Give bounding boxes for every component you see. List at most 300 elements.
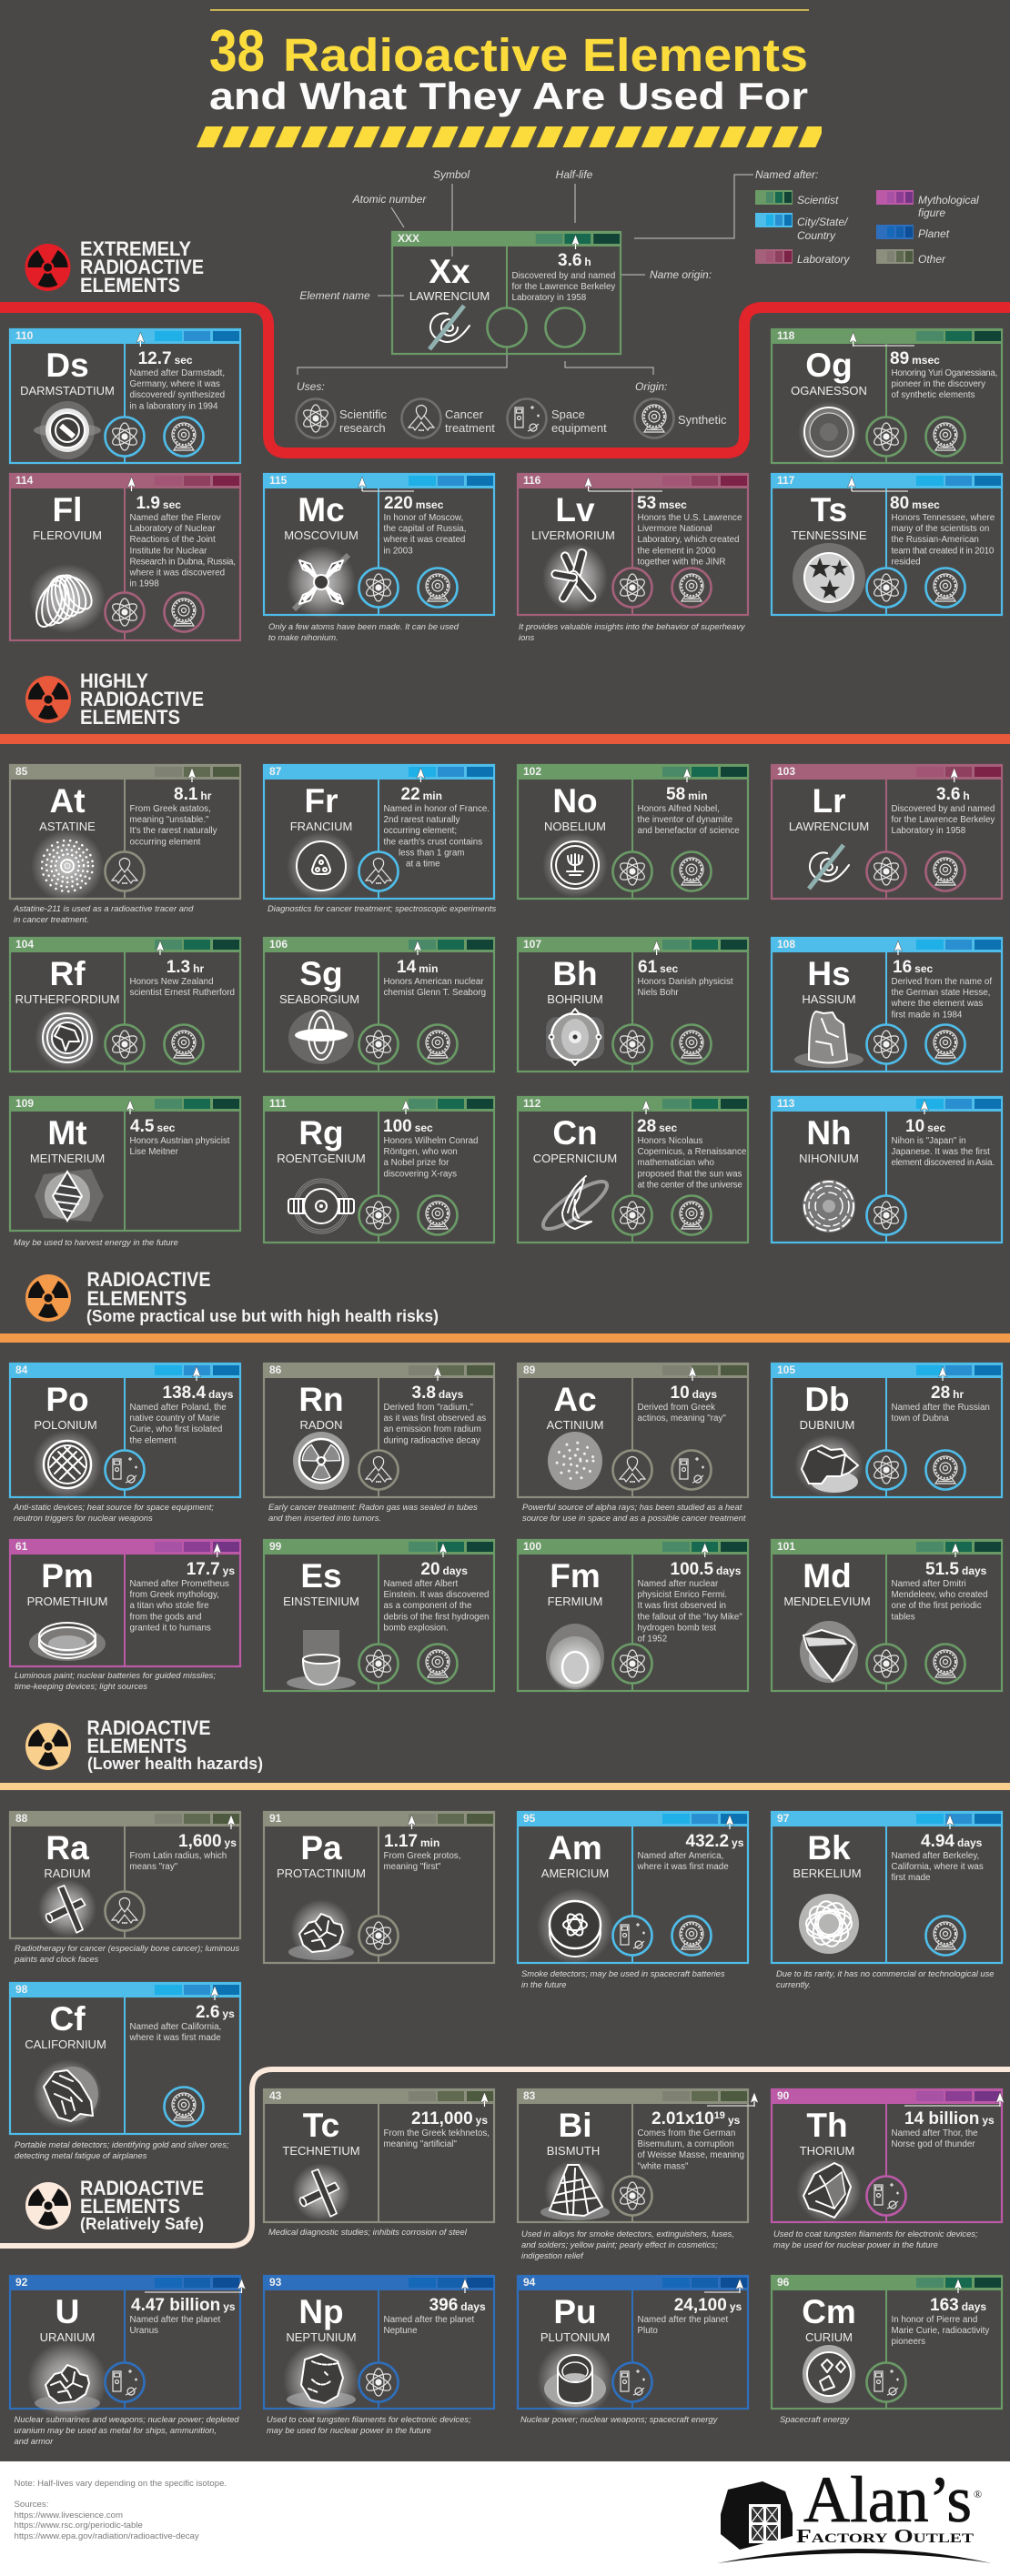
name origin: granted it to humans <box>129 1623 211 1633</box>
use: cancer <box>106 1892 144 1930</box>
name origin: Curie, who first isolated <box>129 1424 222 1434</box>
panel: Ds darmstadtium <box>9 328 241 464</box>
section heading: some practical use: ELEMENTS <box>87 1287 187 1310</box>
name origin: Copernicus, a Renaissance <box>637 1147 747 1157</box>
caption: Bi: Used in alloys for smoke detectors, extinguishers, fuses, <box>521 2229 734 2239</box>
use: research <box>613 1024 651 1064</box>
icon: Pa <box>288 1899 354 1961</box>
element name: BOHRIUM <box>547 992 603 1006</box>
half-life: 80msec <box>890 494 940 513</box>
legend: callout labels: Named after: <box>755 168 818 181</box>
atomic number: 86 <box>269 1363 282 1376</box>
name origin: Named after the Russian <box>892 1403 990 1413</box>
arrow <box>894 941 903 955</box>
symbol: Fm <box>550 1557 601 1595</box>
icon: Pm <box>29 1623 106 1661</box>
use: cancer <box>613 1450 651 1490</box>
panel: Am americium <box>517 1811 749 1965</box>
name origin: From Latin radius, which <box>129 1851 227 1861</box>
name origin: native country of Marie <box>129 1414 220 1424</box>
use: cancer <box>359 1450 399 1490</box>
caption: Cf: Portable metal detectors; identifying gold and silver ores; <box>15 2139 229 2149</box>
arrow <box>921 1100 928 1114</box>
atomic number: 110 <box>15 329 34 342</box>
name origin: of synthetic elements <box>892 390 975 400</box>
element name: BERKELIUM <box>793 1867 862 1880</box>
caption: Th: may be used for nuclear power in the future <box>773 2239 938 2249</box>
name origin: discovered/ synthesized <box>129 390 225 400</box>
element name: MEITNERIUM <box>30 1152 105 1165</box>
legend: uses and origin key: treatment <box>445 421 495 435</box>
caption: Np: Used to coat tungsten filaments for electronic devices; <box>267 2414 471 2424</box>
legend: named-after colour key: City/State/ <box>797 216 849 228</box>
use: cancer <box>106 851 144 891</box>
element name: BISMUTH <box>547 2144 600 2158</box>
name origin: proposed that the sun was <box>637 1169 742 1179</box>
symbol: Po <box>45 1381 89 1418</box>
symbol: Tc <box>303 2107 339 2144</box>
legend: uses and origin key: Uses: <box>297 380 325 393</box>
caption: Rn: and then inserted into tumors. <box>268 1513 381 1523</box>
element name: POLONIUM <box>34 1418 97 1432</box>
symbol: Am <box>548 1829 602 1867</box>
use: synthetic <box>926 1916 965 1956</box>
name origin: Norse god of thunder <box>892 2139 975 2149</box>
name origin: Honors American nuclear <box>384 977 484 987</box>
atomic number: 95 <box>523 1812 536 1825</box>
arrow <box>480 2092 489 2107</box>
legend: uses and origin key: research <box>339 421 386 435</box>
atomic number: 61 <box>15 1540 28 1553</box>
name origin: Research in Dubna, Russia, <box>129 557 236 567</box>
arrow <box>408 1815 416 1829</box>
name origin: together with the JINR <box>637 557 725 567</box>
caption: Bi: indigestion relief <box>521 2250 584 2260</box>
section heading: relatively safe: ELEMENTS <box>80 2195 180 2218</box>
atomic number: 105 <box>777 1363 795 1376</box>
element name: RADON <box>300 1418 342 1432</box>
arrow <box>402 1100 409 1114</box>
name origin: Named after the Flerov <box>129 513 221 523</box>
atomic number: 107 <box>523 938 541 951</box>
section heading: relatively safe <box>25 2177 204 2233</box>
name origin: Honoring Yuri Oganessiana, <box>892 368 997 378</box>
name origin: where it was discovered <box>129 568 225 579</box>
name origin: for the Lawrence Berkeley <box>892 815 995 825</box>
name origin: one of the first periodic <box>892 1601 982 1611</box>
icon: Db <box>794 1434 864 1496</box>
half-life: 2.01x10 <box>651 2109 714 2128</box>
half-life: 100.5days <box>670 1560 742 1579</box>
arrow <box>946 1815 954 1829</box>
caption: Am: Smoke detectors; may be used in spacecraft batteries <box>521 1968 725 1978</box>
arrow <box>849 332 857 347</box>
caption: Pm: time-keeping devices; light sources <box>15 1681 147 1691</box>
name origin: and benefactor of science <box>637 826 740 836</box>
arrow <box>417 768 425 782</box>
element name: COPERNICIUM <box>533 1152 617 1165</box>
element name: MENDELEVIUM <box>783 1595 871 1608</box>
caption: Bk: Due to its rarity, it has no commercial or technological use <box>776 1968 995 1978</box>
element name: RUTHERFORDIUM <box>15 992 119 1006</box>
section heading: extremely radioactive: EXTREMELY <box>80 237 191 260</box>
half-life: 28sec <box>637 1117 677 1136</box>
atomic number: 113 <box>777 1097 795 1110</box>
panel: legend element card <box>391 231 621 355</box>
half-life: 211,000ys <box>411 2109 488 2128</box>
arrow <box>213 1543 221 1557</box>
title block: Radioactive Elements <box>283 29 808 81</box>
cream section border <box>0 2069 1010 2246</box>
half-life: 1.9sec <box>136 494 181 513</box>
name origin: Named after Poland, the <box>129 1403 227 1413</box>
use: synthetic <box>164 1024 204 1064</box>
arrow <box>584 477 592 491</box>
panel: Ac actinium <box>517 1363 749 1498</box>
name origin: first made <box>892 1873 931 1883</box>
section heading: some practical use: RADIOACTIVE <box>87 1268 211 1291</box>
atomic number: 83 <box>523 2089 536 2102</box>
caption: U: uranium may be used as metal for ships, ammunition, <box>15 2425 217 2435</box>
name origin: the earth's crust contains <box>384 837 482 847</box>
name origin: an emission from radium <box>384 1424 481 1434</box>
section band <box>0 1333 1010 1343</box>
atomic number: 84 <box>15 1363 28 1376</box>
name origin: Named in honor of France. <box>384 804 490 814</box>
footer: note and sources: https://www.epa.gov/radiation/radioactive-decay <box>15 2531 199 2541</box>
panel: Sg seaborgium <box>263 937 495 1072</box>
name origin: the German state Hesse, <box>892 988 990 998</box>
arrow <box>652 941 661 955</box>
leader line <box>704 2291 740 2293</box>
name origin: Neptune <box>384 2326 418 2336</box>
name origin: at a time <box>406 859 440 870</box>
panel: Tc technetium <box>263 2088 495 2223</box>
icon: Fr <box>287 831 356 901</box>
use: space <box>106 1450 144 1490</box>
half-life: ys <box>728 2114 741 2127</box>
symbol: Es <box>300 1557 342 1595</box>
panel: legend element card: 3.6h <box>558 251 591 270</box>
use: research <box>613 1195 651 1235</box>
name origin: scientist Ernest Rutherford <box>129 988 235 998</box>
section heading: relatively safe: (Relatively Safe) <box>80 2214 204 2233</box>
symbol: Db <box>804 1381 850 1418</box>
caption: At: in cancer treatment. <box>14 914 89 924</box>
caption: Th: Used to coat tungsten filaments for electronic devices; <box>773 2229 978 2239</box>
symbol: Hs <box>807 955 851 992</box>
panel: Lv livermorium <box>517 473 749 616</box>
name origin: Laboratory of Nuclear <box>129 524 216 534</box>
use: research <box>359 1195 399 1235</box>
icon: Fl <box>29 564 106 633</box>
symbol: At <box>49 782 86 820</box>
section heading: lower health hazards <box>25 1716 263 1773</box>
panel: Rn radon <box>263 1363 495 1498</box>
atomic number: 106 <box>269 938 288 951</box>
arrow <box>227 1815 235 1829</box>
name origin: From the Greek tekhnetos, <box>384 2128 490 2138</box>
use: research <box>866 1645 906 1683</box>
panel: Hs hassium <box>771 937 1003 1072</box>
name origin: It's the rarest naturally <box>129 826 217 836</box>
caption: At: Astatine-211 is used as a radioactive tracer and <box>13 903 194 913</box>
name origin: Germany, where it was <box>129 379 220 389</box>
icon: Ds <box>34 401 101 459</box>
icon: Th <box>796 2158 862 2223</box>
use: research <box>359 1916 399 1956</box>
icon: Am <box>537 1888 613 1965</box>
element name: SEABORGIUM <box>279 992 359 1006</box>
arrow <box>726 1815 733 1829</box>
name origin: the element in 2000 <box>637 546 716 556</box>
use: research <box>359 2363 399 2401</box>
name origin: Named after Dmitri <box>892 1579 966 1589</box>
legend: named-after colour key: Scientist <box>797 194 839 206</box>
icon: No <box>542 832 608 898</box>
element name: DARMSTADTIUM <box>20 384 115 397</box>
name origin: In honor of Moscow, <box>384 513 463 523</box>
element name: THORIUM <box>800 2144 854 2158</box>
use: research <box>106 1024 144 1064</box>
icon: Fm <box>546 1624 604 1693</box>
use: synthetic <box>672 1195 712 1235</box>
name origin: Honors Danish physicist <box>637 977 733 987</box>
name origin: Honors Nicolaus <box>637 1136 702 1146</box>
leader line <box>904 2105 1000 2107</box>
half-life: 14min <box>397 958 438 977</box>
arrow <box>701 1543 709 1557</box>
name origin: chemist Glenn T. Seaborg <box>384 988 486 998</box>
name origin: the capital of Russia, <box>384 524 466 534</box>
section heading: highly radioactive <box>25 669 204 729</box>
icon: Lr <box>809 845 849 889</box>
atomic number: 85 <box>15 765 28 778</box>
legend: named-after colour key <box>755 190 979 266</box>
element name: EINSTEINIUM <box>283 1595 359 1608</box>
symbol: Pu <box>553 2293 597 2330</box>
use: research <box>613 1645 651 1683</box>
name origin: meaning "unstable." <box>129 815 209 825</box>
caption: Ra: Radiotherapy for cancer (especially bone cancer); luminous <box>15 1943 239 1953</box>
icon: Rf <box>35 1005 100 1071</box>
arrow <box>413 941 422 955</box>
name origin: from Greek mythology, <box>129 1590 219 1600</box>
logo: Alan's Factory Outlet: Factory Outlet <box>796 2525 974 2547</box>
name origin: Institute for Nuclear <box>129 546 207 556</box>
legend: named-after colour key: Planet <box>918 227 950 240</box>
symbol: Th <box>806 2107 848 2144</box>
leader line <box>853 345 914 347</box>
section heading: relatively safe: RADIOACTIVE <box>80 2177 204 2199</box>
use: synthetic <box>672 851 712 891</box>
name origin: Röntgen, who won <box>384 1147 458 1157</box>
symbol: U <box>56 2293 79 2330</box>
atomic number: 92 <box>15 2276 28 2289</box>
name origin: at the center of the universe <box>637 1180 742 1190</box>
legend: uses and origin key: equipment <box>551 421 607 435</box>
name origin: It was first observed in <box>637 1601 726 1611</box>
symbol: Mt <box>47 1114 87 1152</box>
arrow <box>952 1543 959 1557</box>
name origin: where the element was <box>890 999 983 1009</box>
name origin: Niels Bohr <box>637 988 679 998</box>
symbol: Nh <box>806 1114 852 1152</box>
legend: uses and origin key: Synthetic <box>678 413 727 427</box>
leader line <box>707 2105 754 2107</box>
panel: Es einsteinium <box>263 1539 495 1692</box>
arrow <box>136 332 145 347</box>
arrow <box>359 477 366 491</box>
name origin: Laboratory, which created <box>637 535 739 545</box>
use: research <box>613 568 651 608</box>
name origin: Named after Thor, the <box>892 2128 978 2138</box>
use: research <box>359 1024 399 1064</box>
symbol: Rn <box>298 1381 344 1418</box>
atomic number: 97 <box>777 1812 790 1825</box>
icon: Ac <box>548 1432 602 1490</box>
use: synthetic <box>419 568 457 608</box>
panel: Cm curium <box>771 2275 1003 2410</box>
use: synthetic <box>672 1024 712 1064</box>
symbol: Og <box>805 347 853 384</box>
symbol: Ac <box>553 1381 597 1418</box>
legend: callout labels: Symbol <box>433 168 470 181</box>
half-life: 20days <box>420 1560 468 1579</box>
half-life: 138.4days <box>162 1384 234 1403</box>
panel: Mc moscovium <box>263 473 495 619</box>
symbol: Ra <box>45 1829 89 1867</box>
half-life: 8.1hr <box>174 785 212 804</box>
icon: Es <box>287 1630 356 1690</box>
atomic number: 43 <box>269 2089 282 2102</box>
icon: Sg <box>288 1010 354 1064</box>
symbol: No <box>552 782 598 820</box>
use: synthetic <box>672 1916 712 1956</box>
arrow <box>211 1986 218 2000</box>
element name: NEPTUNIUM <box>286 2330 357 2344</box>
name origin: Japanese. It was the first <box>892 1147 990 1157</box>
half-life: 10sec <box>905 1117 945 1136</box>
panel: Db dubnium <box>771 1363 1003 1498</box>
element name: LAWRENCIUM <box>789 820 869 833</box>
name origin: in 1998 <box>129 579 159 589</box>
legend: named-after colour key: Other <box>918 253 946 266</box>
panel: Fm fermium <box>517 1539 749 1693</box>
name origin: Named after the planet <box>384 2315 474 2325</box>
panel: Og oganesson <box>771 328 1003 464</box>
use: research <box>866 851 906 891</box>
name origin: Discovered by and named <box>892 804 995 814</box>
icon: Pu <box>537 2341 613 2418</box>
use: synthetic <box>419 1195 457 1235</box>
caption: Pm: Luminous paint; nuclear batteries for guided missiles; <box>15 1670 216 1680</box>
name origin: From Greek astatos, <box>129 804 211 814</box>
legend: named-after colour key: Country <box>797 229 836 242</box>
name origin: a titan who stole fire <box>129 1601 209 1611</box>
name origin: Nihon is "Japan" in <box>892 1136 966 1146</box>
legend: uses and origin key: Origin: <box>635 380 667 393</box>
half-life: 51.5days <box>925 1560 987 1579</box>
name origin: California, where it was <box>892 1862 984 1872</box>
panel: Ts tennessine <box>771 473 1003 616</box>
icon: Np <box>283 2341 359 2418</box>
half-life: 53msec <box>637 494 687 513</box>
use: research <box>866 1195 906 1235</box>
icon: Nh <box>803 1180 855 1233</box>
symbol: Bh <box>552 955 598 992</box>
arrow <box>995 2092 1005 2107</box>
footer: note and sources <box>15 2479 227 2541</box>
half-life: 61sec <box>638 958 678 977</box>
icon: Og <box>798 401 860 463</box>
use: synthetic <box>419 1645 457 1683</box>
name origin: meaning "first" <box>384 1862 441 1872</box>
name origin: the inventor of dynamite <box>637 815 733 825</box>
element name: PROMETHIUM <box>27 1595 107 1608</box>
panel: legend element card: XXX <box>398 232 419 245</box>
name origin: Named after nuclear <box>637 1579 719 1589</box>
icon: Po <box>33 1430 102 1499</box>
use: synthetic <box>926 1645 965 1683</box>
element name: ACTINIUM <box>547 1418 603 1432</box>
name origin: means "ray" <box>129 1862 178 1872</box>
caption: Ac: Powerful source of alpha rays; has been studied as a heat <box>522 1502 742 1512</box>
icon: Rg <box>288 1179 354 1233</box>
arrow <box>750 2092 759 2107</box>
caption: Po: neutron triggers for nuclear weapons <box>14 1513 153 1523</box>
logo: Alan's Factory Outlet <box>717 2463 992 2563</box>
name origin: Honors New Zealand <box>129 977 214 987</box>
atomic number: 112 <box>523 1097 541 1110</box>
arrow <box>126 1100 135 1114</box>
arrow <box>187 768 197 782</box>
name origin: Laboratory in 1958 <box>892 826 966 836</box>
icon: Bi <box>540 2159 610 2221</box>
symbol: Sg <box>299 955 343 992</box>
name origin: Livermore National <box>637 524 712 534</box>
name origin: as it was first observed as <box>384 1414 486 1424</box>
legend: named-after colour key: Laboratory <box>797 253 850 266</box>
name origin: Named after Albert <box>384 1579 458 1589</box>
use: research <box>866 568 906 608</box>
symbol: Mc <box>298 491 345 528</box>
name origin: during radioactive decay <box>384 1435 480 1445</box>
symbol: Rf <box>49 955 86 992</box>
footer: note and sources: https://www.rsc.org/periodic-table <box>15 2521 143 2531</box>
name origin: in a laboratory in 1994 <box>129 401 218 411</box>
name origin: resided <box>892 557 921 567</box>
use: research <box>613 851 651 891</box>
use: cancer <box>359 851 399 891</box>
symbol: Lv <box>555 491 595 528</box>
leader line <box>362 490 414 492</box>
legend: callout labels: Atomic number <box>352 193 427 206</box>
section heading: lower health hazards: (Lower health hazards) <box>87 1754 263 1773</box>
arrow <box>688 1366 697 1381</box>
element name: PROTACTINIUM <box>277 1867 366 1880</box>
use: research <box>106 593 144 631</box>
icon: Cf <box>33 2059 102 2128</box>
atomic number: 88 <box>15 1812 28 1825</box>
legend: callout labels: Name origin: <box>650 268 712 281</box>
legend: callout labels <box>298 168 818 375</box>
name origin: physicist Enrico Fermi. <box>637 1590 727 1600</box>
element name: DUBNIUM <box>800 1418 854 1432</box>
name origin: Bisemutum, a corruption <box>637 2139 734 2149</box>
section heading: highly radioactive: ELEMENTS <box>80 706 180 729</box>
name origin: of Weisse Masse, meaning <box>637 2150 744 2160</box>
